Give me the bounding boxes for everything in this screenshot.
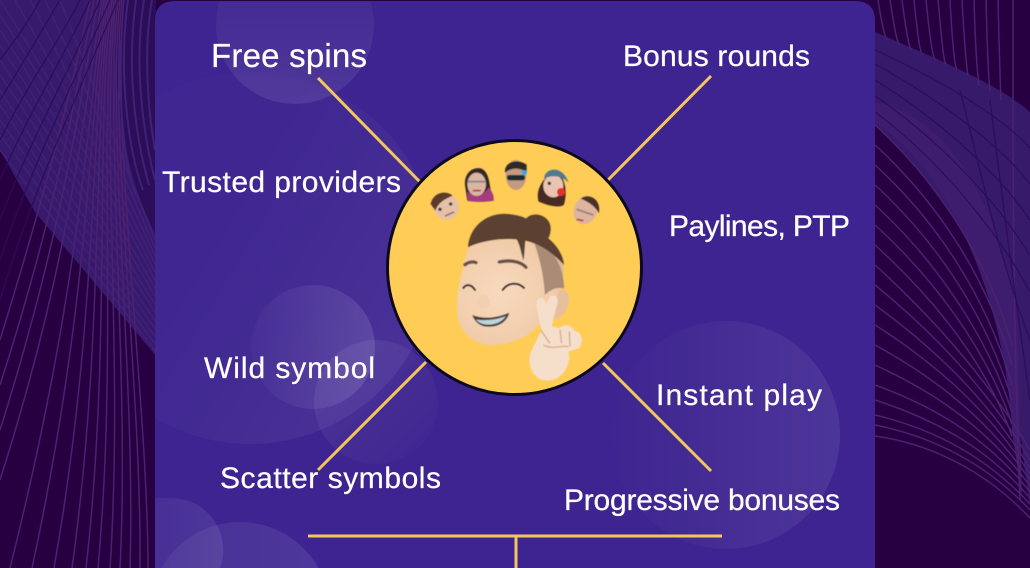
feature label: Bonus rounds: Bonus rounds bbox=[623, 40, 810, 73]
connector lines bbox=[308, 76, 722, 568]
icon: row of five small memoji heads bbox=[429, 160, 602, 228]
feature label: Progressive bonuses: Progressive bonuses bbox=[564, 484, 840, 517]
head 3 bbox=[505, 160, 527, 190]
head 4 bbox=[538, 170, 569, 206]
head 1 bbox=[429, 189, 463, 224]
icon: main memoji with crossed fingers bbox=[457, 214, 582, 381]
central yellow circle bbox=[388, 140, 642, 394]
feature label: Trusted providers: Trusted providers bbox=[162, 166, 401, 199]
head 2 bbox=[465, 168, 494, 202]
left wave pattern bbox=[0, 0, 156, 568]
feature label: Paylines, PTP: Paylines, PTP bbox=[669, 210, 850, 243]
feature label: Instant play: Instant play bbox=[656, 379, 822, 412]
right wave pattern bbox=[875, 0, 1030, 518]
feature label: Free spins: Free spins bbox=[211, 37, 367, 74]
feature label: Scatter symbols: Scatter symbols bbox=[220, 462, 441, 495]
feature label: Wild symbol: Wild symbol bbox=[204, 352, 375, 385]
panel: main card bbox=[155, 1, 875, 568]
head 5 bbox=[569, 192, 602, 228]
